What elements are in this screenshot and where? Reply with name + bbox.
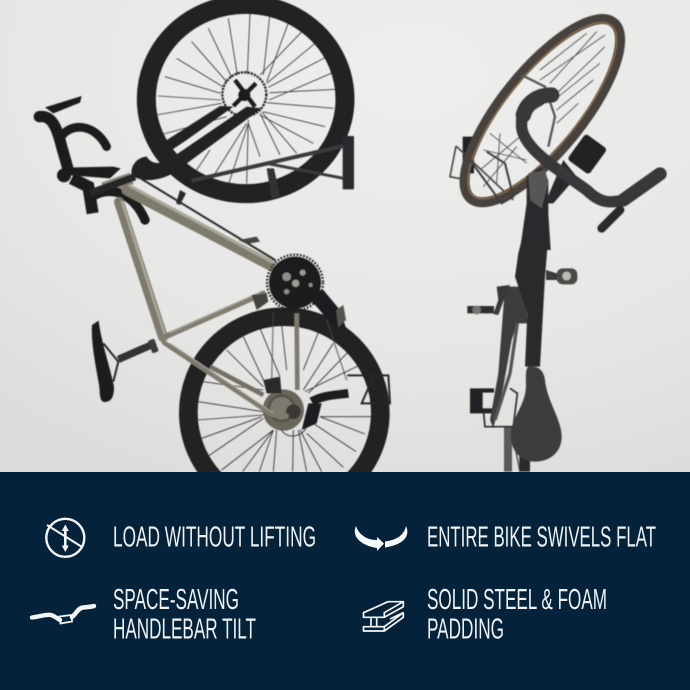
icon: no lifting (46, 519, 84, 557)
text: space-saving handlebar tilt: SPACE-SAVING (113, 584, 239, 616)
frame head (103, 178, 132, 188)
chainstay and seat stay (164, 343, 287, 416)
down tube (515, 240, 548, 367)
bike body (520, 167, 551, 250)
photo: end-on bike on wall rack (440, 0, 660, 250)
left crank and pedal (493, 285, 510, 315)
saddle (511, 367, 562, 462)
wall bracket, rear (470, 388, 494, 413)
wheel, tan sidewall (440, 0, 645, 224)
handlebar (523, 95, 552, 115)
rear triangle (290, 313, 304, 390)
text: solid steel and foam padding: PADDING (427, 614, 504, 646)
panel: features (0, 472, 690, 690)
rack bracket, rear (347, 375, 390, 403)
icon: handlebar (32, 606, 94, 624)
wall mount, front (176, 136, 354, 205)
rear wheel (496, 427, 520, 472)
panel background (0, 472, 690, 690)
seat post (118, 343, 155, 359)
text: load without lifting: LOAD WITHOUT LIFTING (113, 522, 316, 554)
rear wheel spokes (197, 325, 372, 472)
derailleur (312, 393, 348, 402)
rear half of bike (92, 237, 390, 509)
brazed pedal on frame (238, 237, 260, 244)
front wheel (131, 4, 345, 194)
frame, upper tubes (119, 178, 276, 337)
stays (490, 287, 527, 428)
wheel spokes (480, 32, 605, 187)
stem (545, 160, 577, 203)
text: solid steel and foam padding (427, 584, 607, 646)
text: space-saving handlebar tilt (113, 584, 256, 646)
mount plate, top (463, 137, 474, 173)
down tube to bottom bracket (162, 293, 263, 338)
pedal (336, 305, 346, 327)
icon: steel i-beam (364, 602, 403, 631)
right pedal (546, 270, 558, 280)
bottom bracket and crank (303, 290, 347, 330)
photo: side-on bike on wall rack (39, 0, 660, 509)
text: space-saving handlebar tilt: HANDLEBAR TILT (113, 614, 256, 646)
wall background (0, 0, 690, 472)
rear tyre (188, 317, 380, 509)
lower body of end-on bike (467, 240, 577, 472)
icon: swivel arrows (355, 526, 407, 551)
lock and bracket (470, 152, 513, 203)
phone mount (567, 133, 607, 175)
handlebar, side bike (39, 96, 145, 220)
saddle (92, 321, 114, 402)
